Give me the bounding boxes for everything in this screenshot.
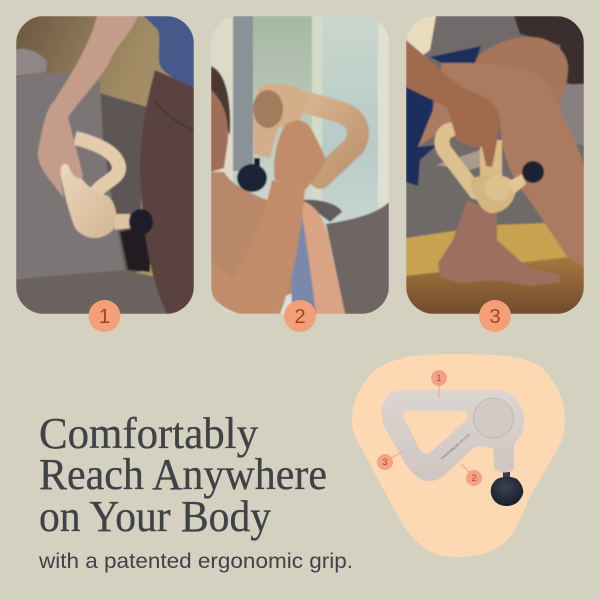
heading [39,409,327,541]
subheading: with a patented ergonomic grip. [38,550,353,573]
badge: 2: 2 [294,306,306,328]
panel: photo 2 [211,16,389,314]
callout 1 [431,370,447,398]
callout 2: 2 [471,473,477,483]
badge: 1: 1 [99,306,110,328]
callout 3: 3 [382,457,388,467]
heading: Comfortably [39,409,258,458]
callout 3 [377,451,403,470]
badge: 1 [88,300,120,332]
product brand text: THERABODY.ELITE [440,433,472,461]
panel: photo 3 [406,16,584,314]
heading: on Your Body [39,492,271,541]
product neck [493,444,514,472]
callout 2 [461,464,482,486]
badge: 3 [479,300,511,332]
callout 1: 1 [436,373,442,383]
product disc [474,398,514,438]
panel: photo 1 [16,16,194,314]
badge: 3: 3 [489,306,501,328]
product: massager [381,390,524,506]
blob background [352,354,565,557]
product shaft [503,472,510,482]
product ball head [491,477,523,506]
heading: Reach Anywhere [39,450,327,499]
badge: 2 [284,300,316,332]
product body [381,390,524,481]
